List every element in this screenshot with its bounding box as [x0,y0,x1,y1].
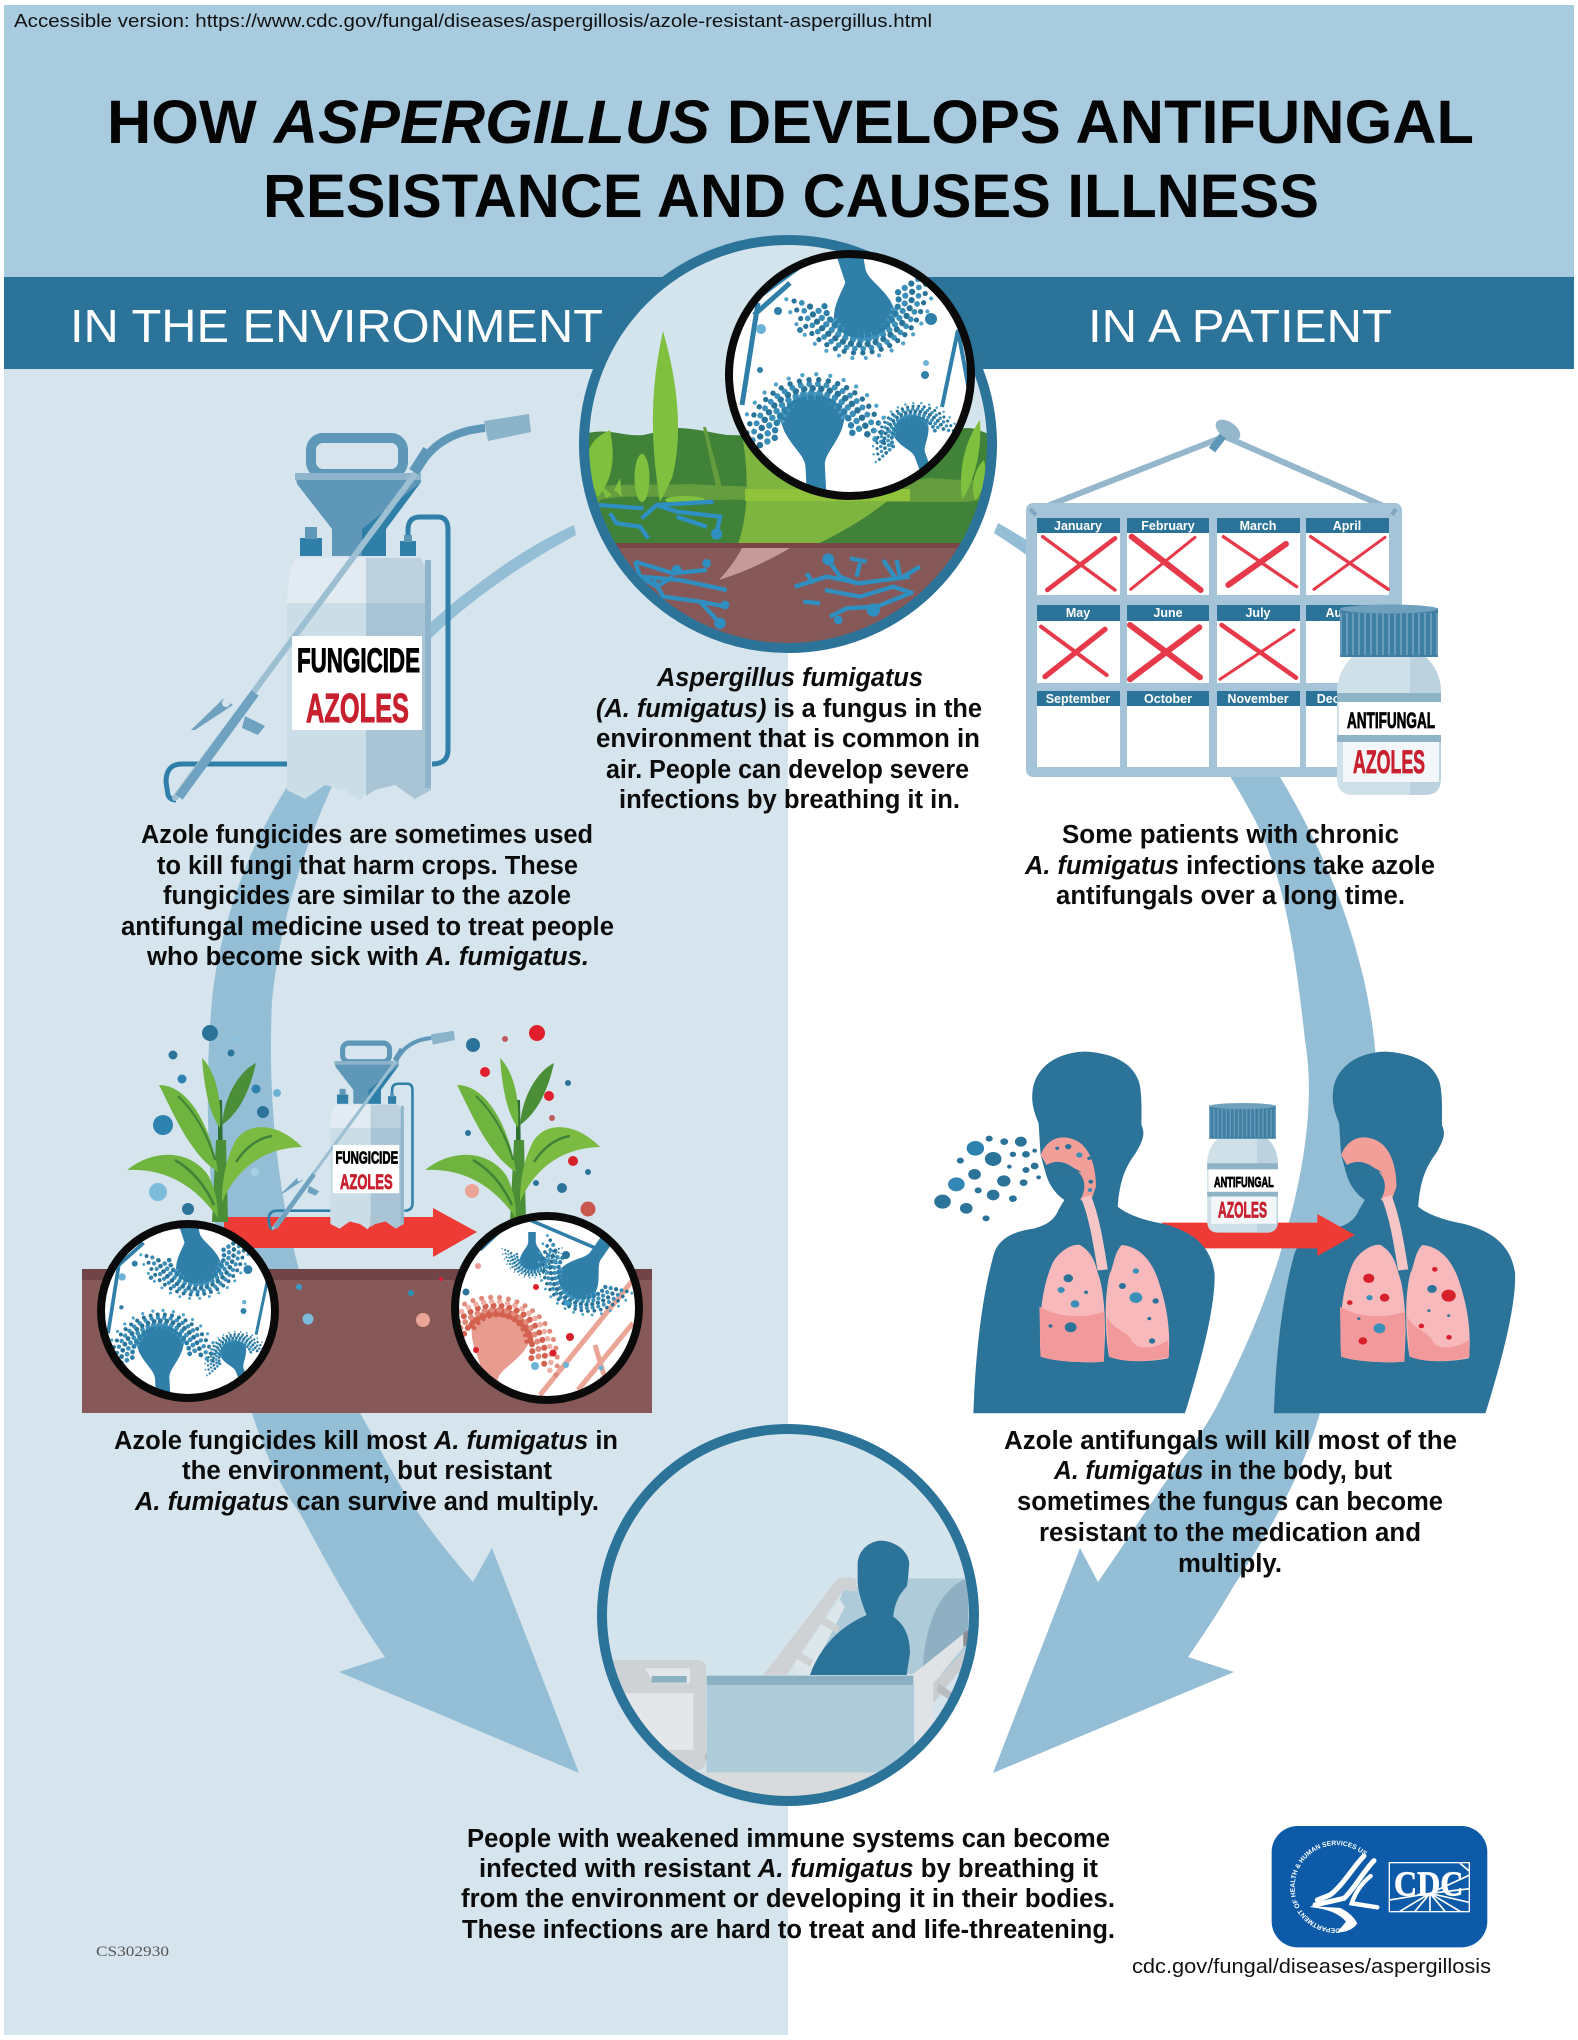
accessible version link text: Accessible version: https://www.cdc.gov/fungal/diseases/aspergillosis/azole-resistant-aspergillus.html [14,11,932,31]
icon: hanging calendar: July [1245,606,1271,620]
lung spots: blue fungus before treatment [1049,1144,1159,1344]
panel: main circle with fungus in soil [570,233,1010,658]
person: after treatment [1274,1052,1515,1413]
text: Aspergillus fumigatus description: Aspergillus fumigatus [656,664,923,692]
spores: inhaled cloud [935,1136,1040,1221]
text: weakened immune systems: infected with resistant A. fumigatus by breathing it [479,1855,1099,1883]
icon: antifungal azoles bottle: AZOLES [1353,744,1425,780]
logo: HHS and CDC [1272,1826,1488,1948]
icon: fungicide sprayer: AZOLES [306,685,409,731]
spores: right cloud [408,1025,596,1327]
text: chronic infection patients [1024,821,1435,910]
icon: hanging calendar [1026,415,1402,777]
CDC box: CDC [1394,1865,1463,1903]
spores: left cloud [149,1025,314,1324]
seal ring text [1290,1840,1367,1933]
text: antifungals and resistance in the body: Azole antifungals will kill most of the [1004,1427,1457,1455]
title: RESISTANCE AND CAUSES ILLNESS [263,162,1319,230]
text: Aspergillus fumigatus description: infections by breathing it in. [619,786,960,814]
lung spots: resistant fungus after treatment [1347,1267,1456,1345]
icon: fungicide sprayer: FUNGICIDE [297,642,420,680]
text: chronic infection patients: antifungals over a long time. [1056,882,1405,910]
text: weakened immune systems: These infections are hard to treat and life-threatening. [462,1916,1115,1944]
icon: hanging calendar: March [1240,519,1276,533]
text: azole fungicides use: antifungal medicine used to treat people [121,913,614,941]
heading: in the environment: IN THE ENVIRONMENT [70,300,603,352]
magnifier: fungus close-up [728,233,972,497]
arrow: patient cycle curved arrow [993,523,1377,1773]
CDC box [1389,1863,1473,1913]
text: fungicide kill and survive [114,1427,618,1516]
plant: after spraying [425,1058,600,1222]
icon: hanging calendar: November [1227,692,1289,706]
icon: hanging calendar: September [1046,692,1110,706]
plant: before spraying [127,1058,302,1222]
section header band [4,277,1574,369]
website url: cdc.gov/fungal/diseases/aspergillosis [1132,1956,1491,1978]
small fungicide sprayer [269,1031,455,1229]
text: fungicide kill and survive: Azole fungicides kill most A. fumigatus in [114,1427,618,1455]
page background: top band [4,5,1574,278]
icon: small antifungal bottle: ANTIFUNGAL [1214,1174,1274,1191]
icon: small antifungal bottle: AZOLES [1218,1198,1267,1223]
seal eagle [1311,1856,1377,1932]
red arrow: sprayed field [224,1208,477,1257]
text: fungicide kill and survive: the environment, but resistant [182,1457,553,1485]
text: azole fungicides use: Azole fungicides are sometimes used [141,821,593,849]
icon: hanging calendar: April [1333,519,1361,533]
small fungicide sprayer: FUNGICIDE [335,1147,398,1167]
text: chronic infection patients: A. fumigatus infections take azole [1024,852,1435,880]
icon: hanging calendar: January [1054,519,1102,533]
hyphae [598,502,920,629]
icon: hanging calendar: August [1325,606,1369,620]
panel: hospital bed circle [600,1429,974,1802]
icon: antifungal azoles bottle: ANTIFUNGAL [1347,708,1435,733]
grass blades [587,331,985,504]
text: Aspergillus fumigatus description: air. People can develop severe [606,756,969,784]
light beam from magnifier [738,440,887,543]
publication code: CS302930 [96,1944,169,1960]
text: Aspergillus fumigatus description: (A. fumigatus) is a fungus in the [596,695,982,723]
icon: fungicide sprayer [166,414,531,800]
arrow: environment cycle curved arrow [208,525,579,1773]
text: antifungals and resistance in the body: resistant to the medication and [1039,1519,1421,1547]
icon: hanging calendar: February [1141,519,1195,533]
red crosses on months [1041,537,1388,679]
text: chronic infection patients: Some patients with chronic [1062,821,1399,849]
text: azole fungicides use: fungicides are similar to the azole [163,882,571,910]
person: before treatment [973,1052,1215,1413]
text: antifungals and resistance in the body: sometimes the fungus can become [1017,1488,1443,1516]
text: azole fungicides use: to kill fungi that harm crops. These [157,852,578,880]
icon: small antifungal bottle [1207,1103,1278,1233]
text: azole fungicides use: who become sick with A. fumigatus. [146,943,589,971]
text: Aspergillus fumigatus description [596,664,982,814]
soil [82,1269,652,1413]
heading: in a patient: IN A PATIENT [1088,300,1392,352]
title: HOW ASPERGILLUS DEVELOPS ANTIFUNGAL [107,88,1474,156]
text: weakened immune systems [461,1825,1115,1944]
text: weakened immune systems: People with weakened immune systems can become [467,1825,1110,1853]
icon: hanging calendar: May [1066,606,1090,620]
small fungicide sprayer: AZOLES [340,1171,393,1194]
icon: hanging calendar: June [1153,606,1183,620]
magnifier: before spraying [98,1206,278,1401]
seal ring text: DEPARTMENT OF HEALTH & HUMAN SERVICES USA [1290,1840,1367,1933]
text: weakened immune systems: from the environment or developing it in their bodies. [461,1885,1115,1913]
icon: hanging calendar: December [1317,692,1377,706]
text: antifungals and resistance in the body [1004,1427,1457,1578]
text: antifungals and resistance in the body: multiply. [1178,1550,1282,1578]
left panel: environment background [4,369,788,2035]
panel: patient lungs before and after treatment [935,1052,1515,1413]
red arrow: treatment [1161,1214,1355,1256]
text: Aspergillus fumigatus description: environment that is common in [596,725,980,753]
title [107,88,1474,230]
icon: antifungal azoles bottle [1337,604,1441,795]
text: azole fungicides use [121,821,614,971]
panel: field scene with sprayed plants [82,1025,652,1416]
icon: hanging calendar: October [1144,692,1192,706]
magnifier: after spraying, resistant fungus [451,1212,643,1404]
text: antifungals and resistance in the body: A. fumigatus in the body, but [1053,1457,1392,1485]
text: fungicide kill and survive: A. fumigatus can survive and multiply. [134,1488,599,1516]
